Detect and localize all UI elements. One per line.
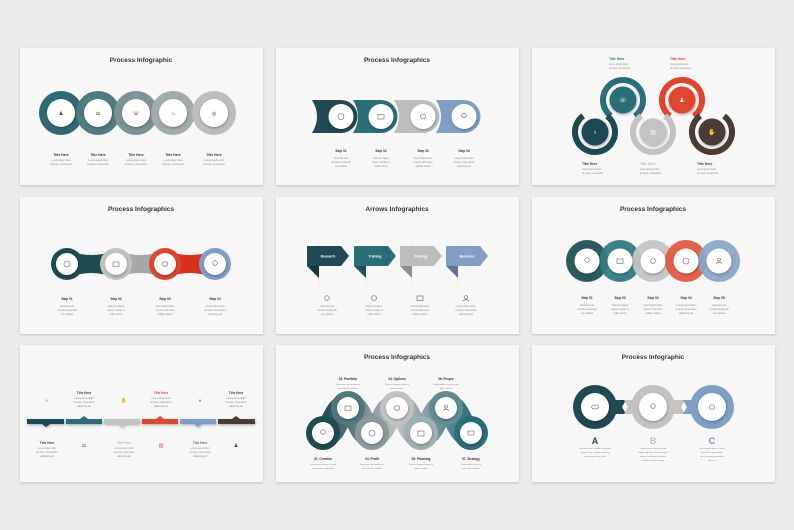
ring chain: ☏ bbox=[133, 111, 139, 117]
bottom callouts bbox=[582, 162, 713, 166]
step labels: Title Here bbox=[90, 153, 106, 157]
step labels: Sociosqu sed bbox=[712, 305, 727, 307]
step labels: sit amet, consectetur bbox=[87, 163, 109, 166]
step labels bbox=[577, 296, 729, 315]
slide 7: timeline bars: sit amet, consectetur bbox=[189, 451, 211, 454]
slide 7: timeline bars: Title Here bbox=[193, 441, 207, 445]
slide 5: arrows infographics: mollis rutrum bbox=[367, 313, 381, 316]
slide 9: ABC process: adipiscing elit sed do eiusmod bbox=[638, 451, 668, 454]
step labels: Sed fringilla faucis bbox=[644, 304, 663, 307]
step labels: mollis rutrum bbox=[109, 313, 123, 316]
letters and text: C bbox=[709, 436, 716, 446]
slide 3: interlocking rings bbox=[532, 48, 775, 185]
step labels: Step 02 bbox=[110, 297, 122, 301]
slide 7: timeline bars: sit amet, consectetur bbox=[225, 401, 247, 404]
title: Process Infographics bbox=[620, 206, 686, 213]
step labels: Dolor et magna bbox=[373, 157, 390, 160]
top icons and texts bbox=[45, 397, 238, 449]
step labels: mollis rutrum bbox=[374, 165, 388, 168]
step labels: Step 05 bbox=[713, 296, 725, 300]
labels: 07. Strategy bbox=[462, 457, 480, 461]
slide 7: timeline bars: adipiscing elit bbox=[154, 405, 168, 408]
step labels: Step 01 bbox=[581, 296, 593, 300]
bars bbox=[27, 416, 255, 427]
step labels: Dolor et magna bbox=[612, 304, 629, 307]
step labels: Lorem ipsum dolor bbox=[676, 304, 696, 307]
arrow flags: Training bbox=[369, 254, 381, 258]
slide 9: ABC process: sapien et nec sodales pulvinar bbox=[580, 451, 610, 454]
ring chain: ⚖ bbox=[96, 111, 101, 117]
slide 7: timeline bars: Lorem ipsum dolor bbox=[114, 447, 134, 450]
top callouts: Title Here bbox=[609, 57, 625, 61]
slide 7: timeline bars: Title Here bbox=[40, 441, 54, 445]
slide 3: interlocking rings: ☏ bbox=[619, 97, 627, 104]
step labels: et amet nibh lorem bbox=[413, 161, 433, 164]
slide 7: timeline bars: adipiscing elit bbox=[40, 455, 54, 458]
slide 1: process infographic rings bbox=[20, 48, 263, 185]
labels: 06. People bbox=[438, 377, 454, 381]
step labels: Title Here bbox=[165, 153, 181, 157]
slide 5: arrows infographics bbox=[276, 197, 519, 334]
top callouts bbox=[609, 57, 686, 61]
step labels: sodales sapien bbox=[415, 166, 431, 168]
step labels: neque, montes et bbox=[372, 161, 390, 164]
slide 3: interlocking rings: ▥ bbox=[650, 130, 656, 136]
step labels: Sed fringilla faucis bbox=[156, 305, 175, 308]
slide 5: arrows infographics: Sed fringilla faucis bbox=[411, 305, 430, 308]
step labels: Sed fringilla faucis bbox=[414, 157, 433, 160]
slide 9: ABC process: Lorem ipsum dolor sit amet bbox=[640, 447, 667, 450]
step labels: Lorem ipsum dolor bbox=[51, 159, 71, 162]
slide 7: timeline bars: adipiscing elit bbox=[117, 455, 131, 458]
labels: Dolor et magna neque et bbox=[409, 463, 433, 466]
step labels: adipiscing elit bbox=[457, 165, 471, 168]
labels: Sociosqu sed conubia et bbox=[336, 383, 360, 386]
labels: 04. Options bbox=[388, 377, 406, 381]
step labels: mollis rutrum bbox=[613, 312, 627, 315]
step labels: adipiscing elit bbox=[679, 312, 693, 315]
step labels: sit amet, consectetur bbox=[453, 161, 475, 164]
slide 7: timeline bars: adipiscing elit bbox=[229, 405, 243, 408]
top icons and texts: ✋ bbox=[121, 397, 127, 404]
slide 3: interlocking rings: sit amet, consectetur bbox=[582, 172, 603, 175]
labels: Dolor et magna neque et bbox=[385, 383, 409, 386]
step labels: Sociosqu sed bbox=[60, 306, 75, 308]
rings bbox=[566, 240, 740, 282]
slide 9: ABC process: dolor sit bbox=[708, 459, 716, 462]
top icons and texts: ▥ bbox=[159, 443, 164, 449]
step labels: nec sodales bbox=[581, 313, 594, 315]
arrow flags bbox=[307, 246, 488, 278]
ring chain: ♨ bbox=[171, 111, 175, 117]
arrow flags: Strategy bbox=[414, 254, 428, 258]
slide 3: interlocking rings: sit amet, consectetur bbox=[609, 67, 630, 70]
step labels: Lorem ipsum dolor bbox=[126, 159, 146, 162]
top callouts: Title Here bbox=[670, 57, 686, 61]
title: Process Infographics bbox=[108, 206, 174, 213]
step labels: et amet nibh lorem bbox=[155, 309, 175, 312]
slide 7: timeline bars: Lorem ipsum dolor bbox=[226, 397, 246, 400]
step labels: Sociosqu sed bbox=[580, 305, 595, 307]
step labels: Lorem ipsum dolor bbox=[163, 159, 183, 162]
slide 5: arrows infographics: neque, montes et bbox=[365, 309, 383, 312]
step labels: sodales sapien bbox=[157, 314, 173, 316]
slide 3: interlocking rings: Lorem ipsum dolor bbox=[609, 63, 628, 66]
slide 9: ABC process: nibh lorem ipsum dolor bbox=[701, 451, 723, 454]
labels: montes mollis bbox=[414, 467, 429, 470]
step labels: conubia et placerat bbox=[331, 161, 351, 164]
step labels: Step 02 bbox=[375, 149, 387, 153]
step labels: Step 04 bbox=[209, 297, 221, 301]
slide 3: interlocking rings: ♁ bbox=[593, 130, 597, 136]
bottom callouts: Title Here bbox=[640, 162, 656, 166]
slide 5: arrows infographics: Lorem ipsum dolor bbox=[456, 305, 476, 308]
step labels bbox=[50, 153, 225, 166]
top icons and texts: ● bbox=[198, 398, 202, 404]
step labels: Title Here bbox=[53, 153, 69, 157]
title: Process Infographic bbox=[622, 354, 685, 361]
labels: 01. Creative bbox=[314, 457, 332, 461]
step labels: sit amet, consectetur bbox=[50, 163, 72, 166]
step labels bbox=[331, 149, 475, 168]
slide 9: ABC process: et dolore magna aliqua bbox=[642, 459, 665, 462]
slide 2: process infographics chevrons bbox=[276, 48, 519, 185]
step labels: Step 03 bbox=[159, 297, 171, 301]
slide 7: timeline bars: Lorem ipsum dolor bbox=[74, 397, 94, 400]
slide 7: timeline bars bbox=[20, 345, 263, 482]
arrow flags: Business bbox=[460, 254, 474, 258]
letters and text bbox=[592, 436, 716, 446]
slide 7: timeline bars: sit amet, consectetur bbox=[73, 401, 95, 404]
labels: Sed fringilla faucis et amet bbox=[433, 383, 459, 386]
labels: Sed fringilla faucis et bbox=[461, 463, 481, 466]
step labels: Step 02 bbox=[614, 296, 626, 300]
ring chain bbox=[39, 91, 236, 135]
slide 3: interlocking rings: Lorem ipsum dolor bbox=[697, 168, 716, 171]
step labels: sodales sapien bbox=[645, 313, 661, 315]
slide 8: wave process bbox=[276, 345, 519, 482]
step labels: Lorem ipsum dolor bbox=[204, 159, 224, 162]
step labels: sit amet, consectetur bbox=[204, 309, 226, 312]
labels: 02. Portfolio bbox=[339, 377, 357, 381]
letters and text: A bbox=[592, 436, 599, 446]
slide 7: timeline bars: sit amet, consectetur bbox=[150, 401, 172, 404]
slide 9: ABC process: tempor incididunt ut labore bbox=[640, 455, 667, 458]
step labels: nec sodales bbox=[713, 313, 726, 315]
bottom callouts: Title Here bbox=[697, 162, 713, 166]
top icons and texts: ♁ bbox=[45, 398, 49, 404]
labels: 03. Profit bbox=[365, 457, 380, 461]
slide 7: timeline bars: sit amet, consectetur bbox=[36, 451, 58, 454]
step labels: Step 03 bbox=[417, 149, 429, 153]
slide 7: timeline bars: Title Here bbox=[154, 391, 168, 395]
title: Process Infographics bbox=[364, 57, 430, 64]
slide 7: timeline bars: Lorem ipsum dolor bbox=[190, 447, 210, 450]
slide 5: arrows infographics: conubia et placerat bbox=[317, 309, 337, 312]
slide 3: interlocking rings: Lorem ipsum dolor bbox=[582, 168, 601, 171]
bottom callouts: Title Here bbox=[582, 162, 598, 166]
slide 5: arrows infographics: sit amet, consectetur bbox=[455, 309, 477, 312]
letters and text: B bbox=[650, 436, 657, 446]
ring chain: ♟ bbox=[59, 111, 63, 117]
labels: Sociosqu sed conubia et bbox=[360, 463, 384, 466]
slide 3: interlocking rings: Lorem ipsum dolor bbox=[640, 168, 659, 171]
labels: 05. Planning bbox=[412, 457, 430, 461]
slide 5: arrows infographics: Dolor et magna bbox=[366, 305, 383, 308]
top icons and texts: ♟ bbox=[234, 443, 238, 449]
circles bbox=[573, 385, 734, 429]
step labels: neque, montes et bbox=[611, 308, 629, 311]
step labels: conubia et placerat bbox=[57, 309, 77, 312]
slide 5: arrows infographics: et amet nibh lorem bbox=[410, 309, 430, 312]
step labels: Step 04 bbox=[458, 149, 470, 153]
slide 9: ABC process: sociis natoque penatibus bbox=[700, 455, 725, 458]
rings bbox=[567, 72, 740, 160]
slide 5: arrows infographics: nec sodales bbox=[321, 314, 334, 316]
slide 3: interlocking rings: sit amet, consectetur bbox=[670, 67, 691, 70]
slide 3: interlocking rings: ♟ bbox=[679, 97, 685, 104]
slide 7: timeline bars: Lorem ipsum dolor bbox=[151, 397, 171, 400]
slide 9: ABC process: Sed fringilla faucis et amet bbox=[699, 447, 725, 450]
step labels: sit amet, consectetur bbox=[675, 308, 697, 311]
step labels: Title Here bbox=[206, 153, 222, 157]
slide 3: interlocking rings: sit amet, consectetur bbox=[697, 172, 718, 175]
labels: montes mollis bbox=[390, 387, 405, 390]
ring chain: ◎ bbox=[212, 111, 217, 117]
icons and text bbox=[325, 296, 469, 301]
step labels: Step 01 bbox=[335, 149, 347, 153]
slide 7: timeline bars: adipiscing elit bbox=[77, 405, 91, 408]
step labels: conubia et placerat bbox=[709, 308, 729, 311]
step labels: et amet nibh lorem bbox=[643, 308, 663, 311]
labels: nibh sodales bbox=[440, 388, 453, 390]
labels: amet nibh sodales bbox=[462, 467, 481, 470]
step labels: nec sodales bbox=[61, 314, 74, 316]
labels: consectetur adipiscing bbox=[312, 467, 335, 470]
slide 3: interlocking rings: ✋ bbox=[708, 128, 716, 136]
wave band bbox=[306, 391, 488, 450]
slide 7: timeline bars: Title Here bbox=[117, 441, 131, 445]
step labels: Title Here bbox=[128, 153, 144, 157]
title: Process Infographic bbox=[110, 57, 173, 64]
step labels: neque, montes et bbox=[107, 309, 125, 312]
labels: Lorem ipsum dolor sit amet bbox=[310, 463, 337, 466]
labels: placerat nec sodales bbox=[362, 467, 383, 470]
step labels: Lorem ipsum dolor bbox=[454, 157, 474, 160]
slide 7: timeline bars: Title Here bbox=[77, 391, 91, 395]
step labels: conubia et placerat bbox=[577, 308, 597, 311]
slide 7: timeline bars: adipiscing elit bbox=[193, 455, 207, 458]
title: Arrows Infographics bbox=[365, 206, 429, 213]
slide 9: ABC process: Sociosqu sed conubia et placerat bbox=[579, 447, 612, 450]
step labels: Lorem ipsum dolor bbox=[205, 305, 225, 308]
step labels bbox=[57, 297, 226, 316]
slide 5: arrows infographics: Sociosqu sed bbox=[320, 306, 335, 308]
step labels: Step 01 bbox=[61, 297, 73, 301]
title: Process Infographics bbox=[364, 354, 430, 361]
step labels: sit amet, consectetur bbox=[203, 163, 225, 166]
step labels: sit amet, consectetur bbox=[162, 163, 184, 166]
step labels: Step 04 bbox=[680, 296, 692, 300]
labels: placerat nec sodales bbox=[338, 387, 359, 390]
arrow flags: Research bbox=[321, 254, 335, 258]
chain bbox=[51, 248, 231, 280]
slide 3: interlocking rings: sit amet, consectetur bbox=[640, 172, 661, 175]
slide 7: timeline bars: Lorem ipsum dolor bbox=[37, 447, 57, 450]
chevron shapes bbox=[312, 100, 480, 133]
step labels: Dolor et magna bbox=[108, 305, 125, 308]
connectors bbox=[612, 400, 695, 414]
slide 9: ABC process bbox=[532, 345, 775, 482]
guide lines bbox=[319, 242, 458, 287]
step labels: nec sodales bbox=[335, 166, 348, 168]
slide 5: arrows infographics: adipiscing elit bbox=[459, 313, 473, 316]
slide 7: timeline bars: Title Here bbox=[229, 391, 243, 395]
step labels: Sociosqu sed bbox=[334, 158, 349, 160]
labels bbox=[310, 377, 481, 470]
slide 5: arrows infographics: sodales sapien bbox=[412, 314, 428, 316]
step labels: Lorem ipsum dolor bbox=[88, 159, 108, 162]
step labels: Step 03 bbox=[647, 296, 659, 300]
slide 4: linked circles bbox=[20, 197, 263, 334]
slide 3: interlocking rings: Lorem ipsum dolor bbox=[670, 63, 689, 66]
slide 7: timeline bars: sit amet, consectetur bbox=[113, 451, 135, 454]
slide 6: five overlapping rings bbox=[532, 197, 775, 334]
slide 9: ABC process: sociis neque sem tellus bbox=[584, 455, 607, 458]
step labels: sit amet, consectetur bbox=[125, 163, 147, 166]
step labels: adipiscing elit bbox=[208, 313, 222, 316]
top icons and texts: ⚖ bbox=[82, 443, 87, 449]
